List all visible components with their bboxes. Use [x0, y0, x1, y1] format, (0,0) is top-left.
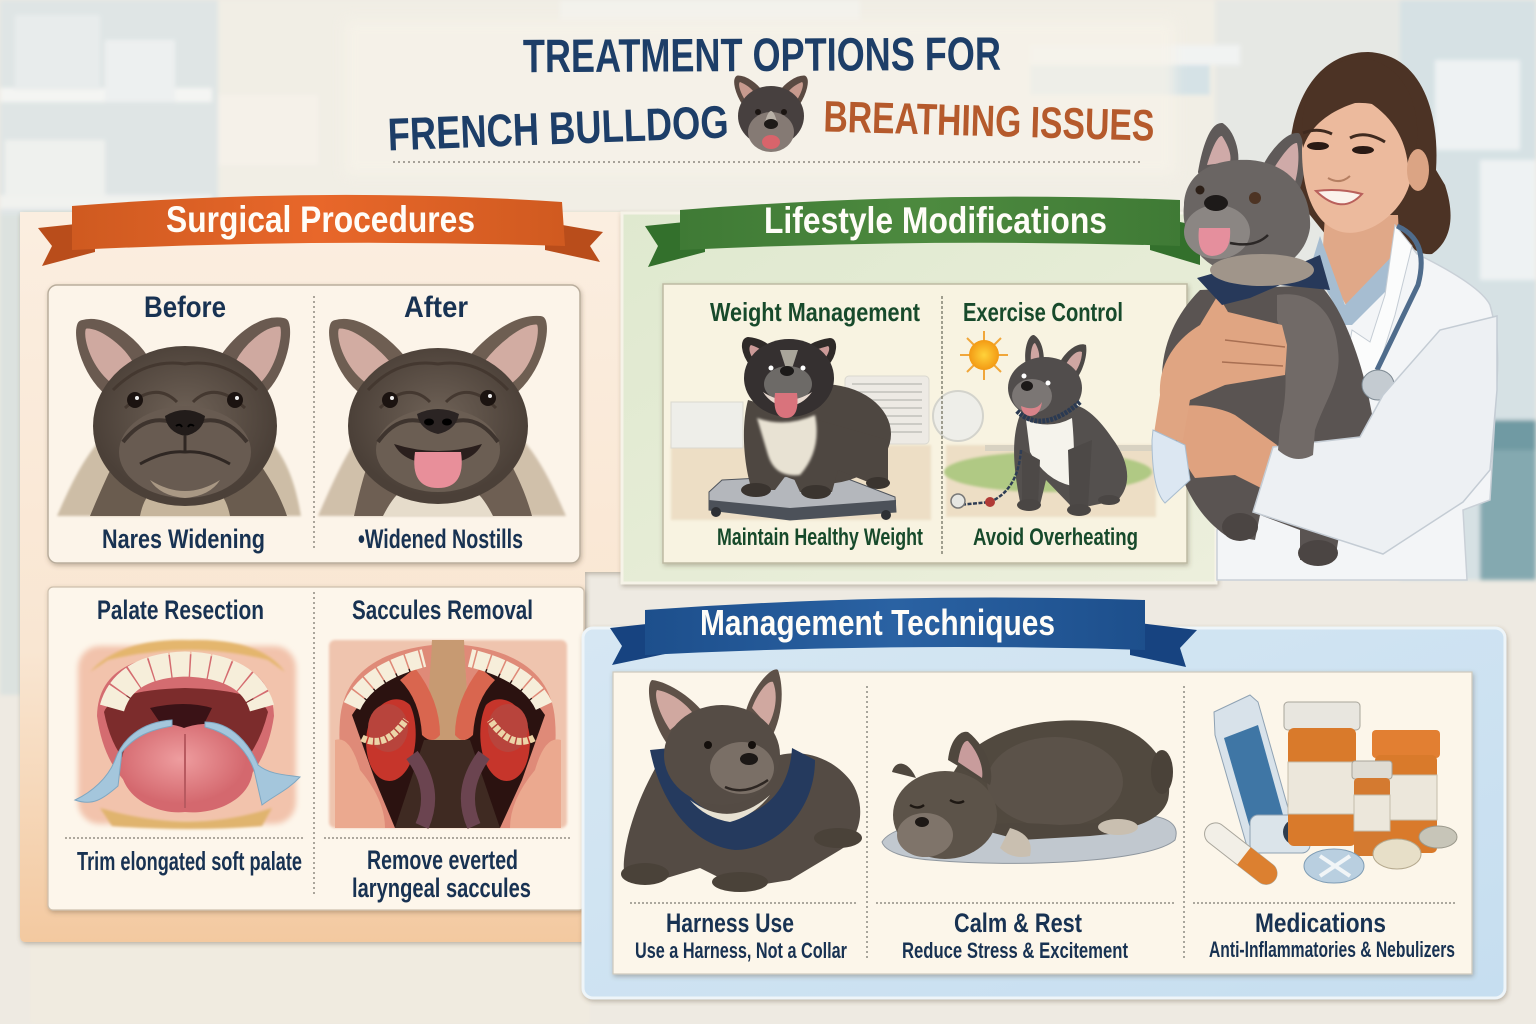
heading: palate resection: Palate Resection — [97, 595, 264, 625]
heading: exercise control: Exercise Control — [963, 297, 1123, 327]
caption: nares widening: Nares Widening — [102, 524, 265, 554]
vet face — [1302, 58, 1429, 233]
heading: saccules removal: Saccules Removal — [352, 595, 533, 625]
heading: weight management: Weight Management — [710, 297, 920, 327]
vet left cuff — [1152, 430, 1190, 503]
vet neck — [1322, 215, 1400, 305]
coat lapel — [1345, 225, 1412, 420]
illustration: dog before surgery — [57, 323, 301, 516]
caption: trim elongated soft palate: Trim elongated soft palate — [77, 846, 302, 876]
illustration: laryngeal saccules — [329, 640, 567, 828]
illustration: veterinarian holding french bulldog — [1152, 52, 1498, 580]
room backdrop — [671, 376, 1160, 520]
ribbon: surgical procedures — [38, 195, 603, 266]
vet left forearm and upper hand — [1153, 295, 1287, 440]
ribbon: surgical procedures: Surgical Procedures — [166, 199, 475, 240]
icon: scale — [709, 474, 896, 520]
vet white coat — [1217, 225, 1498, 580]
caption: remove everted laryngeal saccules — [352, 845, 531, 903]
dog harness — [1197, 255, 1330, 305]
caption: avoid overheating: Avoid Overheating — [973, 524, 1138, 551]
vet hair back — [1289, 52, 1451, 254]
vet lower hand — [1170, 405, 1277, 490]
illustration: medications — [1200, 695, 1457, 889]
stethoscope chest piece — [1362, 370, 1394, 400]
panel: lifestyle modifications — [622, 197, 1216, 583]
caption: harness use — [635, 908, 847, 963]
caption: widened nostrils: •Widened Nostills — [358, 524, 523, 554]
icon: title dog head — [737, 78, 805, 152]
heading: after: After — [404, 291, 468, 324]
caption: remove everted laryngeal saccules: laryngeal saccules — [352, 873, 531, 903]
vet right sleeve — [1253, 316, 1497, 554]
illustration: open mouth palate — [75, 640, 300, 829]
dog rear paws — [1222, 513, 1338, 566]
caption: calm and rest: Reduce Stress & Excitement — [902, 938, 1129, 963]
caption: harness use: Use a Harness, Not a Collar — [635, 938, 847, 963]
vet scrubs — [1312, 236, 1402, 325]
stethoscope — [1377, 226, 1421, 370]
illustration: dog on leash — [951, 335, 1127, 516]
dog body — [1162, 285, 1373, 560]
panel: management techniques — [583, 598, 1505, 998]
dog front leg — [1277, 294, 1339, 459]
card: management items — [613, 669, 1472, 974]
title line 2 right: BREATHING ISSUES — [823, 92, 1155, 151]
ribbon: lifestyle modifications — [645, 197, 1200, 267]
caption: medications: Medications — [1255, 908, 1386, 938]
title line 1: TREATMENT OPTIONS FOR — [523, 27, 1001, 82]
dog head — [1184, 125, 1314, 286]
caption: remove everted laryngeal saccules: Remove everted — [367, 845, 518, 875]
illustration: dog wearing harness — [621, 669, 862, 892]
ribbon: management techniques — [610, 598, 1197, 667]
illustration: overweight dog — [741, 339, 891, 499]
panel: surgical procedures — [20, 195, 622, 942]
card: before and after nares widening — [48, 285, 580, 563]
heading: before: Before — [144, 291, 226, 324]
illustration: sleeping dog on mat — [882, 720, 1176, 863]
caption: calm and rest: Calm & Rest — [954, 908, 1082, 938]
caption: medications — [1209, 908, 1455, 962]
ribbon: lifestyle modifications: Lifestyle Modifications — [764, 200, 1107, 241]
caption: maintain healthy weight: Maintain Healthy Weight — [717, 524, 923, 551]
title block — [345, 20, 1175, 175]
card: palate and saccules — [48, 587, 584, 910]
card: weight and exercise — [663, 284, 1187, 563]
illustration: dog after surgery — [318, 322, 566, 516]
caption: calm and rest — [902, 908, 1129, 963]
icon: sun — [960, 331, 1008, 380]
ribbon: management techniques: Management Techniques — [700, 602, 1055, 643]
caption: harness use: Harness Use — [666, 908, 794, 938]
title line 2 left: FRENCH BULLDOG — [387, 95, 729, 161]
